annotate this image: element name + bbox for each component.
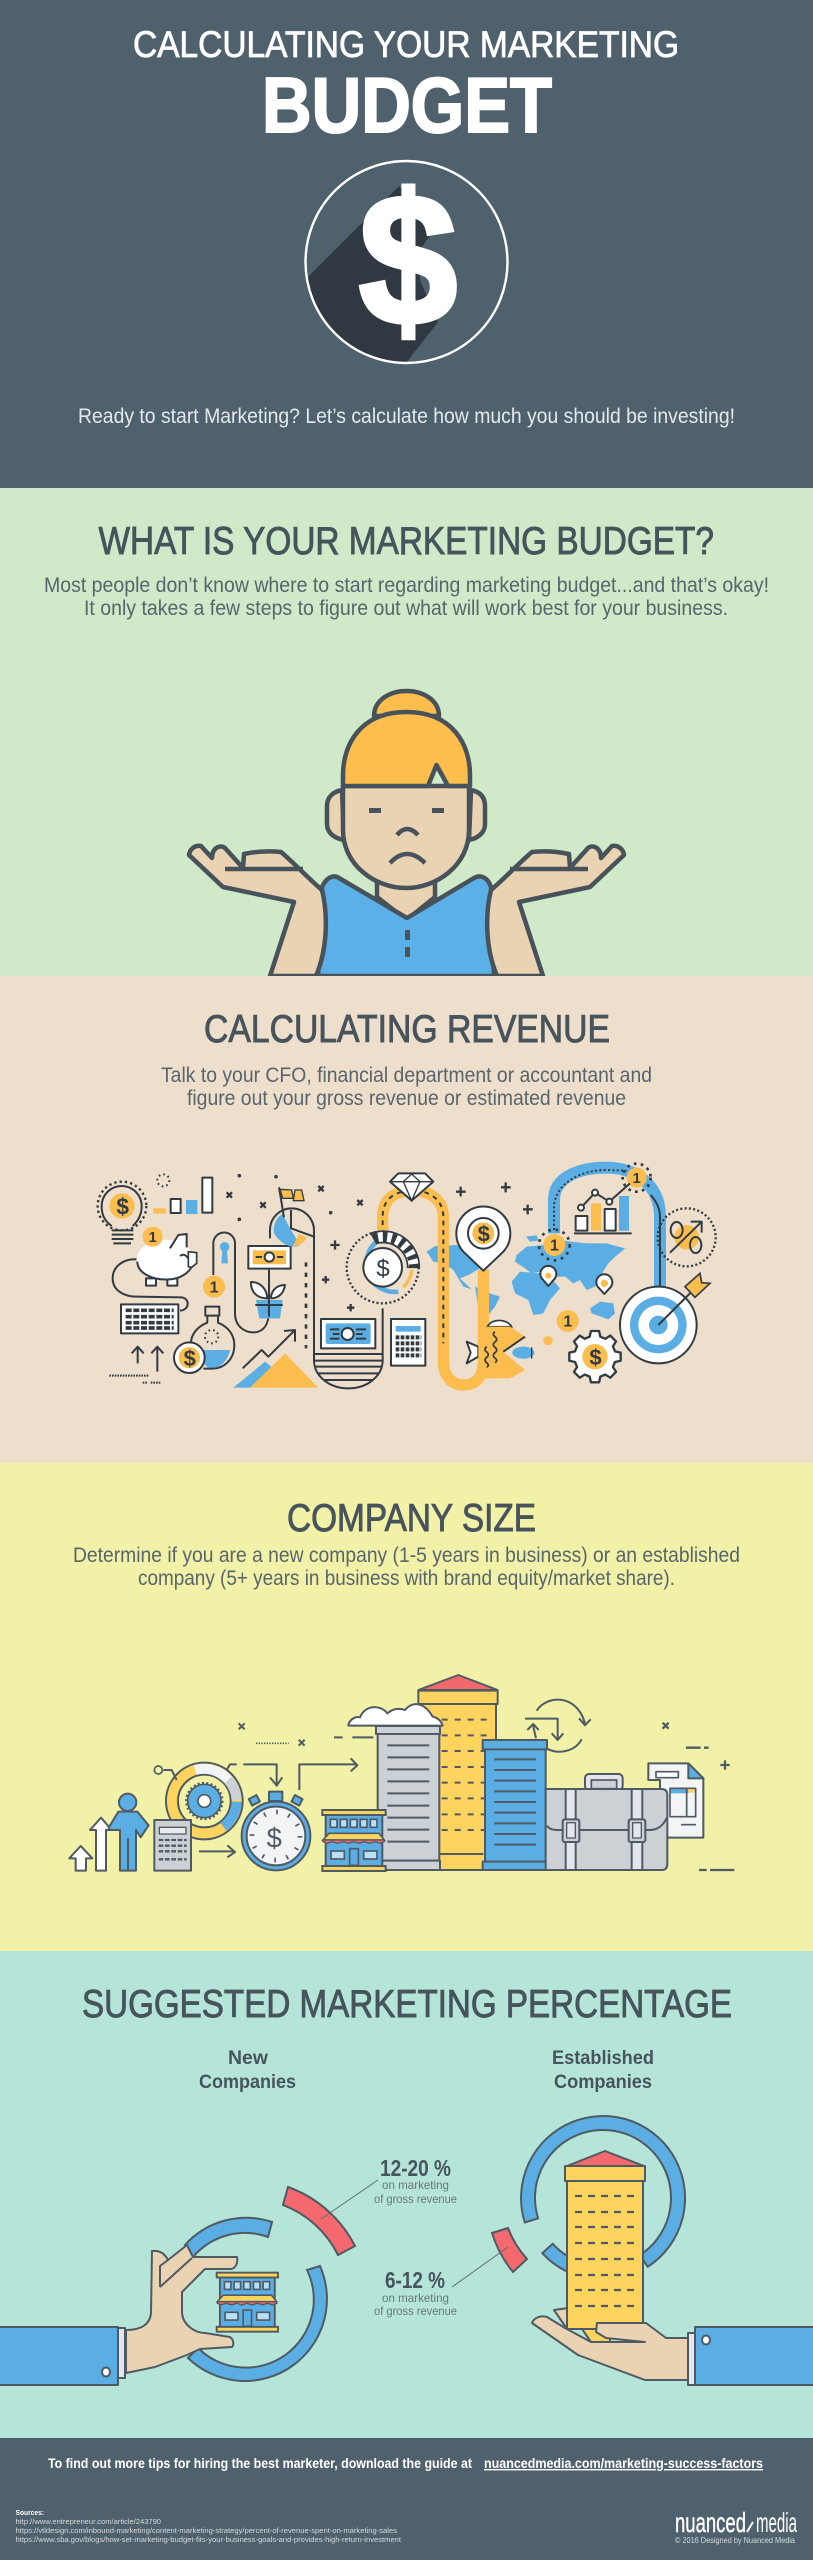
icon: stopwatch: $	[267, 1823, 282, 1854]
tube line	[213, 1232, 269, 1332]
panel: header	[80, 30, 734, 428]
icon: small store	[217, 2273, 278, 2332]
illustration: tower on hand	[532, 2151, 813, 2385]
sources: Sources:	[16, 2508, 44, 2517]
panel: what is your marketing budget	[0, 488, 813, 976]
logo: © 2016 Designed by Nuanced Media	[675, 2536, 795, 2545]
percentage: 12-20	[374, 2155, 457, 2206]
icon: keyboard	[121, 1304, 178, 1333]
percentage: 6-12	[374, 2267, 457, 2318]
sources	[16, 2508, 402, 2544]
icon: keyhole	[220, 1242, 229, 1263]
coin: one top	[623, 1164, 651, 1192]
icon: light bulb: $	[116, 1193, 129, 1219]
illustration: left hand	[0, 2245, 237, 2385]
marks	[663, 1723, 734, 1870]
icon: person	[109, 1794, 149, 1871]
coin: one: 1	[210, 1279, 219, 1296]
icon: briefcase	[546, 1774, 667, 1870]
revenue text	[161, 1064, 652, 1110]
label: new companies: New	[228, 2048, 268, 2069]
illustration: company left	[69, 1704, 443, 1871]
icon: location pin	[456, 1207, 510, 1271]
heading: CALCULATING REVENUE	[204, 1008, 610, 1051]
small coin	[543, 1336, 553, 1345]
icon: cloud	[348, 1704, 443, 1726]
percentage: 6-12: of gross revenue	[374, 2304, 457, 2318]
illustration: finance icons right	[456, 1164, 716, 1382]
company text: company (5+ years in business with brand equity/market share).	[138, 1567, 675, 1590]
icon: money plant	[248, 1246, 291, 1318]
revenue text: Talk to your CFO, financial department or accountant and	[161, 1064, 652, 1087]
panel: calculating revenue	[0, 976, 813, 1463]
coin: one top: 1	[633, 1171, 641, 1187]
icon: up arrows	[132, 1347, 163, 1372]
logo: nuanced	[675, 2507, 746, 2538]
icon: location pin: $	[478, 1222, 490, 1247]
illustration: shrugging woman	[189, 691, 624, 976]
red segment: established	[492, 2228, 527, 2272]
title: budget: BUDGET	[262, 61, 552, 149]
coin: one lower: 1	[563, 1314, 572, 1331]
icon: bar chart	[574, 1183, 632, 1233]
icon: gear ring	[154, 1766, 237, 1833]
icon: banknote document	[313, 1319, 385, 1380]
marks	[239, 1723, 373, 1746]
coin: one left	[539, 1230, 570, 1260]
label: established companies	[552, 2048, 654, 2093]
icon: document	[648, 1763, 703, 1838]
label: new companies: Companies	[199, 2072, 296, 2093]
revenue text: figure out your gross revenue or estimated revenue	[187, 1087, 626, 1110]
coin: one lower	[557, 1310, 579, 1332]
icon: mountains and growth arrow	[233, 1330, 318, 1388]
illustration: finance icons left	[98, 1173, 483, 1388]
icon: signal bars	[153, 1174, 212, 1214]
icon: percent	[658, 1208, 716, 1266]
icon: calculator	[391, 1319, 425, 1366]
coin: one left: 1	[550, 1238, 559, 1255]
intro text	[44, 574, 769, 620]
arrows	[199, 1758, 357, 1857]
call to action: To find out more tips for hiring the best marketer, download the guide at	[48, 2455, 472, 2471]
icon: blue track	[554, 1168, 660, 1287]
building: blue tower	[483, 1740, 547, 1870]
dotted arc	[554, 1170, 627, 1230]
label: new companies	[199, 2048, 296, 2093]
icon: plus marks	[456, 1182, 533, 1214]
established company ring	[521, 2116, 685, 2277]
callout line: established	[452, 2247, 508, 2287]
company text: Determine if you are a new company (1-5 years in business) or an established	[73, 1544, 740, 1567]
title line: CALCULATING YOUR MARKETING	[133, 24, 679, 65]
new company ring	[185, 2218, 327, 2381]
heading: WHAT IS YOUR MARKETING BUDGET?	[98, 520, 714, 563]
sources: https://www.sba.gov/blogs/how-set-marketing-budget-fits-your-business-goals-and-provides-high-return-investment	[16, 2535, 402, 2544]
panel: company size	[0, 1463, 813, 1951]
icon: cycle arrows	[525, 1700, 591, 1752]
header subtitle: Ready to start Marketing? Let’s calculate how much you should be investing!	[78, 405, 735, 428]
icon: pie chart	[270, 1187, 383, 1388]
icon: diamond	[390, 1173, 433, 1201]
percentage: 12-20: on marketing	[382, 2178, 449, 2192]
dashed track line	[383, 1191, 443, 1343]
icon: dollar badge	[300, 157, 508, 372]
dotted line	[256, 1741, 289, 1746]
panel: footer	[0, 2438, 813, 2560]
link: nuancedmedia.com/marketing-success-factors	[484, 2455, 763, 2471]
icon: gear	[569, 1331, 621, 1382]
icon: small pins	[540, 1266, 612, 1294]
percentage: 6-12: on marketing	[382, 2291, 449, 2305]
dash column	[302, 1262, 310, 1348]
icon: piggy bank: 1	[149, 1230, 157, 1246]
icon: world map	[427, 1235, 625, 1328]
icon: coin dial	[347, 1231, 419, 1303]
icon: piggy bank	[113, 1227, 197, 1311]
icon: target	[620, 1273, 710, 1363]
sources: http://www.entrepreneur.com/article/243790	[16, 2517, 161, 2526]
icon: gear: $	[589, 1345, 602, 1370]
icon: coin dial: $	[376, 1256, 390, 1283]
building: yellow tower	[418, 1675, 498, 1870]
percentage: 6-12: 6-12 %	[385, 2267, 445, 2293]
intro text: It only takes a few steps to figure out what will work best for your business.	[84, 597, 728, 620]
icon: light bulb	[98, 1182, 146, 1243]
icon: dollar badge: $	[359, 157, 457, 364]
icon: flask: $	[184, 1346, 196, 1371]
red segment: new	[283, 2187, 355, 2255]
heading: COMPANY SIZE	[287, 1497, 536, 1540]
icon: growth arrows	[69, 1818, 112, 1871]
dotted line and short dashes	[109, 1376, 161, 1383]
coin: one	[203, 1276, 225, 1298]
label: established companies: Companies	[554, 2072, 652, 2093]
percentage: 12-20: 12-20 %	[380, 2155, 451, 2181]
percentage: 12-20: of gross revenue	[374, 2192, 457, 2206]
intro text: Most people don’t know where to start regarding marketing budget...and that’s okay!	[44, 574, 769, 597]
icon: calculator	[154, 1820, 191, 1871]
illustration: company right	[483, 1700, 734, 1870]
yellow track	[383, 1191, 483, 1385]
callout line: new	[321, 2180, 378, 2219]
label: established companies: Established	[552, 2048, 654, 2069]
dark line	[651, 1195, 660, 1287]
icon: store	[322, 1810, 386, 1871]
icon: stopwatch	[242, 1792, 310, 1870]
sources: https://vtldesign.com/inbound-marketing/content-marketing-strategy/percent-of-revenue-spent-on-marketing-sales	[16, 2526, 397, 2535]
panel: suggested marketing percentage	[0, 1951, 813, 2438]
icon: flask	[174, 1307, 234, 1373]
building: grey tower	[375, 1726, 440, 1870]
company text	[73, 1544, 740, 1590]
icon: fish	[467, 1320, 534, 1378]
decorative marks	[227, 1175, 363, 1311]
